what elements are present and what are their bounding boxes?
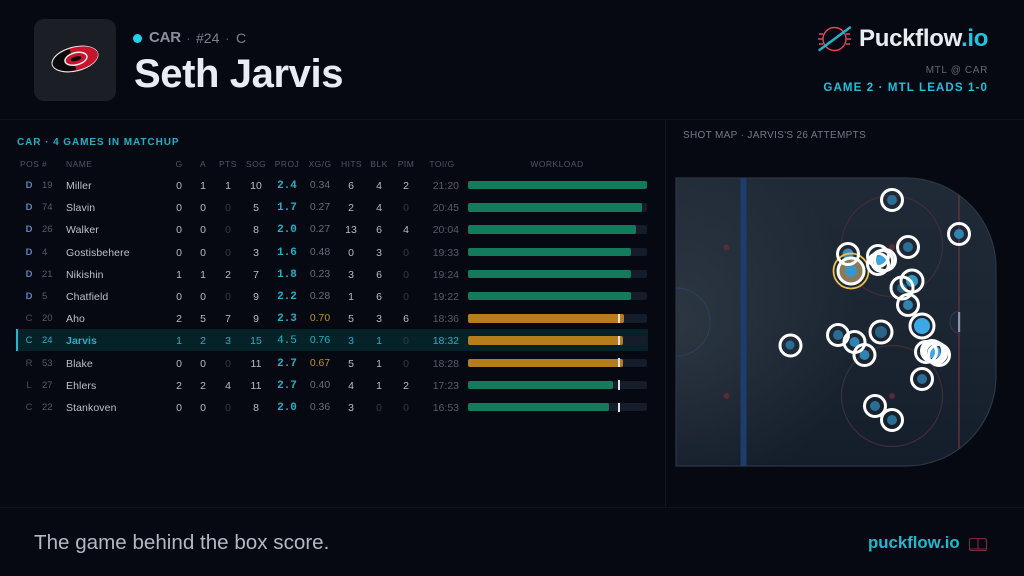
row: Chatfield: 0.28: [310, 291, 330, 302]
row: Aho: 5: [200, 313, 206, 325]
row: Miller: D: [26, 180, 32, 191]
row: Walker: 4: [403, 224, 409, 236]
shot map rink: [675, 177, 997, 467]
row: Aho: 0.70: [310, 313, 330, 324]
row: Stankoven: 0: [176, 402, 182, 414]
row: Blake: R: [26, 358, 32, 369]
row: Slavin: [26, 202, 647, 214]
column headers: HITS: [341, 159, 362, 169]
row: Slavin: 20:45: [433, 202, 459, 214]
row: Stankoven: 2.0: [277, 402, 297, 414]
row: Gostisbehere: 0.48: [310, 247, 330, 258]
row: Blake: 53: [42, 358, 53, 369]
row: Slavin: 0.27: [310, 202, 330, 213]
column headers: NAME: [66, 159, 92, 169]
row: Blake: Blake: [66, 358, 93, 370]
row: Ehlers: 4: [225, 380, 231, 392]
row: Ehlers: 1: [376, 380, 382, 392]
row: Miller: 2.4: [277, 180, 297, 192]
row: Jarvis highlighted: 3: [225, 335, 231, 347]
row: Aho: C: [26, 313, 32, 324]
row: Slavin: 0: [200, 202, 206, 214]
player meta line: CAR: [149, 29, 181, 46]
row: Ehlers: 0.40: [310, 380, 330, 391]
row: Jarvis highlighted: 15: [250, 335, 262, 347]
row: Miller: 1: [225, 180, 231, 192]
footer tagline: The game behind the box score.: [34, 530, 329, 554]
row: Jarvis highlighted: 0.76: [310, 335, 330, 346]
header divider: [0, 119, 1024, 120]
row: Ehlers: Ehlers: [66, 380, 96, 392]
row: Stankoven: 3: [348, 402, 354, 414]
row: Gostisbehere: 3: [253, 247, 259, 259]
row: Chatfield: 2.2: [277, 291, 297, 303]
row: Ehlers: 4: [348, 380, 354, 392]
row: Aho: Aho: [66, 313, 85, 325]
row: Nikishin: 0.23: [310, 269, 330, 280]
row: Nikishin: 2: [225, 269, 231, 281]
row: Nikishin: 1: [176, 269, 182, 281]
column headers: PIM: [398, 159, 414, 169]
row: Jarvis highlighted: 0: [403, 335, 409, 347]
row: Gostisbehere: 0: [176, 247, 182, 259]
row: Ehlers: 2.7: [277, 380, 297, 392]
column headers: SOG: [246, 159, 266, 169]
row: Gostisbehere: 19:33: [433, 247, 459, 259]
row: Walker: Walker: [66, 224, 99, 236]
row: Slavin: 74: [42, 202, 53, 213]
brand logo: Puckflow.io: [859, 25, 988, 52]
row: Jarvis highlighted: 1: [176, 335, 182, 347]
player name: Seth Jarvis: [134, 52, 343, 96]
row: Blake: 5: [348, 358, 354, 370]
row: Ehlers: 2: [200, 380, 206, 392]
row: Nikishin: Nikishin: [66, 269, 104, 281]
row: Stankoven: 0: [376, 402, 382, 414]
row: Slavin: 0: [403, 202, 409, 214]
row: Walker: 0: [200, 224, 206, 236]
shot dots: [786, 195, 964, 425]
row: Slavin: 4: [376, 202, 382, 214]
row: Jarvis highlighted: C: [26, 335, 32, 346]
row: Walker: 6: [376, 224, 382, 236]
row: Ehlers: L: [26, 380, 32, 391]
row: Aho: 20: [42, 313, 53, 324]
row: Gostisbehere: Gostisbehere: [66, 247, 130, 259]
column headers: POS: [20, 159, 39, 169]
row: Ehlers: 27: [42, 380, 53, 391]
row: Blake: 18:28: [433, 358, 459, 370]
highlighted shot ring: [834, 254, 868, 288]
row: Ehlers: 2: [403, 380, 409, 392]
row: Miller: Miller: [66, 180, 92, 192]
row: Gostisbehere: 1.6: [277, 247, 297, 259]
row: Blake: 0: [225, 358, 231, 370]
row: Blake: 0: [176, 358, 182, 370]
row: Walker: 20:04: [433, 224, 459, 236]
row: Aho: 6: [403, 313, 409, 325]
row: Stankoven: C: [26, 402, 32, 413]
row: Gostisbehere: 4: [42, 247, 47, 258]
row: Nikishin: 6: [376, 269, 382, 281]
row: Stankoven: 0.36: [310, 402, 330, 413]
row: Miller: 4: [376, 180, 382, 192]
row: Aho: 18:36: [433, 313, 459, 325]
row: Chatfield: 0: [403, 291, 409, 303]
rink markings: [676, 178, 960, 466]
row: Stankoven: 0: [403, 402, 409, 414]
player meta line: #24: [196, 30, 219, 46]
row: Ehlers: 17:23: [433, 380, 459, 392]
row: Gostisbehere: 0: [348, 247, 354, 259]
row: Jarvis highlighted: 18:32: [433, 335, 459, 347]
row: Nikishin: 19:24: [433, 269, 459, 281]
row: Ehlers: 2: [176, 380, 182, 392]
row: Nikishin: [26, 269, 647, 281]
row: Gostisbehere: [26, 247, 647, 259]
row: Jarvis highlighted: [16, 329, 648, 351]
row: Jarvis highlighted: 2: [200, 335, 206, 347]
player meta line: ·: [186, 30, 191, 46]
row: Chatfield: 19:22: [433, 291, 459, 303]
row: Slavin: 0: [225, 202, 231, 214]
row: Nikishin: 3: [348, 269, 354, 281]
row: Gostisbehere: 0: [200, 247, 206, 259]
row: Chatfield: [26, 291, 647, 303]
row: Aho: 9: [253, 313, 259, 325]
row: Stankoven: 8: [253, 402, 259, 414]
row: Miller: 1: [200, 180, 206, 192]
shot markers: [780, 190, 970, 430]
row: Slavin: 0: [176, 202, 182, 214]
column headers: BLK: [370, 159, 388, 169]
table: player stats: [16, 159, 648, 414]
row: Aho: [26, 313, 647, 325]
game status: GAME 2 · MTL LEADS 1-0: [823, 82, 988, 94]
footer divider: [0, 507, 1024, 508]
row: Miller: 19: [42, 180, 53, 191]
team logo tile: [34, 19, 116, 101]
rink surface: [676, 178, 996, 466]
row: Chatfield: 0: [225, 291, 231, 303]
row: Walker: 2.0: [277, 224, 297, 236]
row: Stankoven: [26, 402, 647, 414]
column headers: PROJ: [275, 159, 299, 169]
row: Blake: 0.67: [310, 358, 330, 369]
row: Gostisbehere: 3: [376, 247, 382, 259]
row: Slavin: 2: [348, 202, 354, 214]
panel divider: [665, 120, 666, 507]
row: Ehlers: [26, 380, 647, 392]
row: Walker: 26: [42, 224, 53, 235]
row: Miller: 10: [250, 180, 262, 192]
row: Walker: 0.27: [310, 224, 330, 235]
row: Stankoven: 0: [200, 402, 206, 414]
row: Slavin: 1.7: [277, 202, 297, 214]
row: Miller: 6: [348, 180, 354, 192]
row: Blake: 11: [251, 358, 261, 370]
row: Aho: 7: [225, 313, 231, 325]
row: Stankoven: 22: [42, 402, 53, 413]
row: Chatfield: Chatfield: [66, 291, 108, 303]
row: Jarvis highlighted: 4.5: [277, 335, 297, 347]
row: Chatfield: D: [26, 291, 32, 302]
shot map title: SHOT MAP · JARVIS'S 26 ATTEMPTS: [683, 130, 866, 141]
row: Chatfield: 9: [253, 291, 259, 303]
row: Blake: 0: [200, 358, 206, 370]
row: Nikishin: 1: [200, 269, 206, 281]
row: Jarvis highlighted: Jarvis: [66, 335, 97, 347]
player meta line: [133, 29, 246, 46]
row: Gostisbehere: 0: [225, 247, 231, 259]
row: Miller: 0.34: [310, 180, 330, 191]
column headers: WORKLOAD: [530, 159, 584, 169]
row: Stankoven: 0: [225, 402, 231, 414]
row: Blake: 1: [376, 358, 382, 370]
row: Aho: 2.3: [277, 313, 297, 325]
row: Chatfield: 6: [376, 291, 382, 303]
row: Miller: 2: [403, 180, 409, 192]
row: Blake: [26, 358, 647, 370]
column headers: TOI/G: [429, 159, 455, 169]
row: Walker: 13: [345, 224, 357, 236]
row: Slavin: 5: [253, 202, 259, 214]
row: Blake: 0: [403, 358, 409, 370]
row: Blake: 2.7: [277, 358, 297, 370]
column headers: XG/G: [308, 159, 332, 169]
column headers: G: [175, 159, 183, 169]
row: Jarvis highlighted: 1: [376, 335, 382, 347]
row: Chatfield: 5: [42, 291, 47, 302]
row: Nikishin: 0: [403, 269, 409, 281]
icon: book: [968, 538, 988, 551]
matchup label: MTL @ CAR: [926, 64, 988, 76]
row: Miller: 21:20: [433, 180, 459, 192]
row: Aho: 3: [376, 313, 382, 325]
row: Miller: 0: [176, 180, 182, 192]
player meta line: C: [236, 30, 246, 46]
row: Chatfield: 1: [348, 291, 354, 303]
row: Stankoven: Stankoven: [66, 402, 117, 414]
row: Slavin: D: [26, 202, 32, 213]
row: Stankoven: 16:53: [433, 402, 459, 414]
row: Chatfield: 0: [176, 291, 182, 303]
row: Ehlers: 11: [251, 380, 261, 392]
table title: CAR · 4 GAMES IN MATCHUP: [17, 137, 179, 148]
column headers: A: [200, 159, 206, 169]
row: Walker: [26, 224, 647, 236]
footer url: puckflow.io: [868, 532, 960, 552]
row: Nikishin: 7: [253, 269, 259, 281]
column headers: #: [42, 159, 47, 169]
row: Walker: 0: [176, 224, 182, 236]
row: Walker: 0: [225, 224, 231, 236]
column headers: [20, 159, 584, 169]
row: Slavin: Slavin: [66, 202, 95, 214]
row: Gostisbehere: D: [26, 247, 32, 258]
row: Walker: 8: [253, 224, 259, 236]
row: Gostisbehere: 0: [403, 247, 409, 259]
row: Aho: 5: [348, 313, 354, 325]
row: Jarvis highlighted: 24: [42, 335, 53, 346]
row: Nikishin: 21: [42, 269, 53, 280]
row: Walker: D: [26, 224, 32, 235]
row: Aho: 2: [176, 313, 182, 325]
column headers: PTS: [219, 159, 237, 169]
row: Nikishin: 1.8: [277, 269, 297, 281]
row: Nikishin: D: [26, 269, 32, 280]
row: Jarvis highlighted: 3: [348, 335, 354, 347]
row: Miller: [26, 180, 647, 192]
row: Chatfield: 0: [200, 291, 206, 303]
player meta line: ·: [225, 30, 230, 46]
